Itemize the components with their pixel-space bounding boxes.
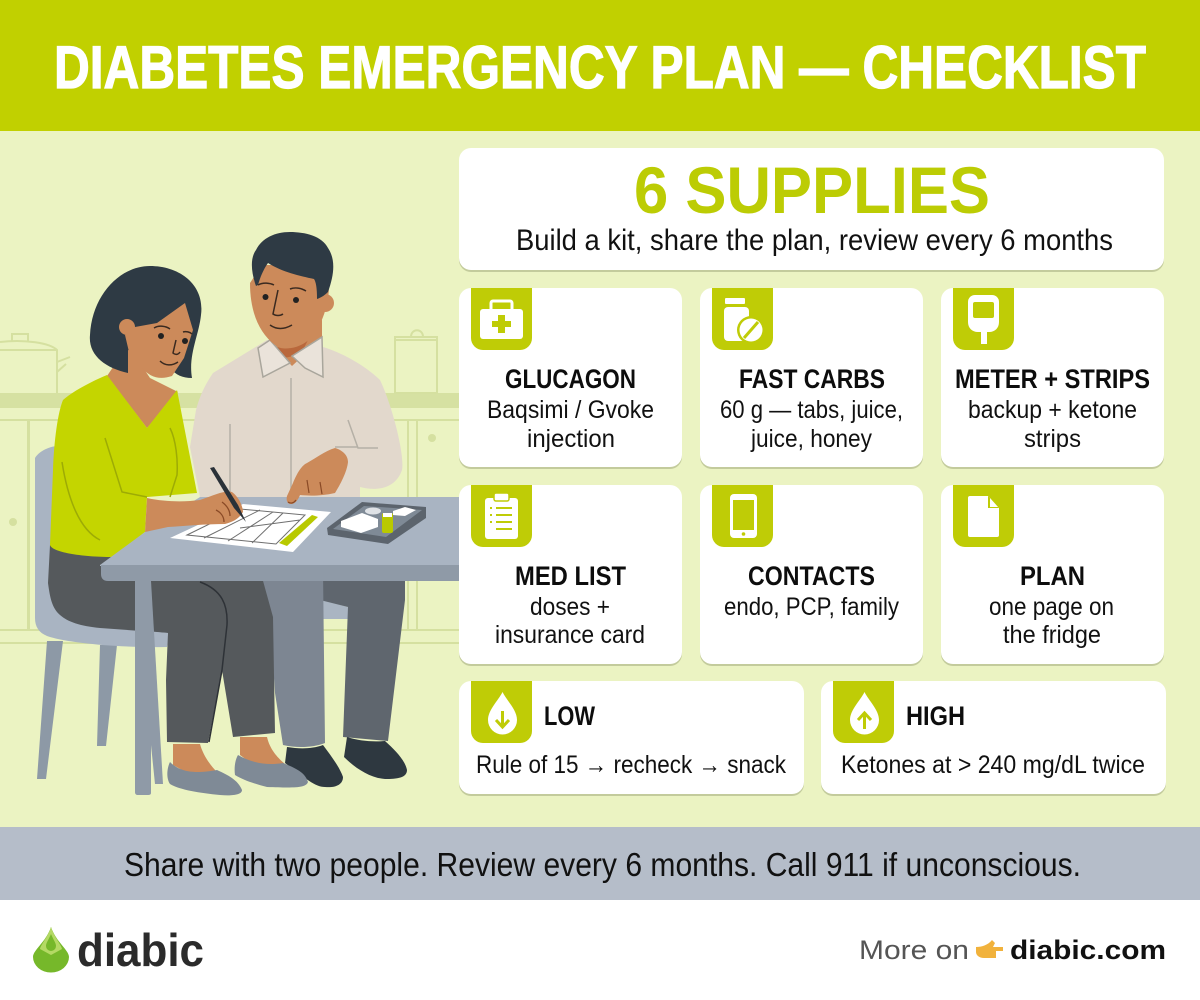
logo: diabic: diabic (77, 924, 204, 976)
supplies tray (327, 502, 426, 544)
chair seat front (135, 630, 168, 647)
checklist paper (170, 504, 331, 552)
icon: drop with up arrow (833, 681, 894, 743)
card: contacts: endo, PCP, family (724, 593, 899, 621)
card: plan: PLAN (1020, 561, 1085, 591)
website link (859, 935, 1166, 965)
title banner (0, 0, 1200, 131)
card: contacts (700, 485, 923, 666)
card: plan: one page on (989, 593, 1114, 621)
icon: pill bottle (712, 288, 773, 350)
woman's legs and shoes (48, 545, 308, 795)
card: low: LOW (544, 701, 595, 731)
table (100, 497, 459, 795)
card: low (459, 681, 804, 796)
card: meter + strips: backup + ketone (968, 396, 1137, 424)
woman's head (90, 266, 201, 378)
reminder band (0, 827, 1200, 900)
card: high: Ketones at > 240 mg/dL twice (841, 751, 1145, 779)
card: fast carbs: 60 g — tabs, juice, (720, 396, 903, 424)
headline card: Build a kit, share the plan, review every 6 months (516, 224, 1113, 257)
icon: clipboard (471, 485, 532, 547)
icon: logo drop (33, 927, 69, 972)
card: high (821, 681, 1166, 796)
card: fast carbs: juice, honey (750, 425, 872, 453)
card: fast carbs: FAST CARBS (739, 364, 885, 394)
man's legs and shoes (260, 570, 407, 787)
headline card (459, 148, 1164, 272)
icon: first aid kit (471, 288, 532, 350)
man's torso (190, 320, 402, 497)
reminder band: Share with two people. Review every 6 months. Call 911 if unconscious. (124, 846, 1081, 883)
card: plan (941, 485, 1164, 666)
woman's arm and hand with pen (145, 467, 246, 532)
card: med list: insurance card (495, 621, 645, 649)
icon: document (953, 485, 1014, 547)
kitchen backdrop (0, 330, 460, 643)
card: low: Rule of 15 → recheck → snack (476, 751, 786, 779)
card: med list: doses + (530, 593, 610, 621)
website link: diabic.com (1010, 935, 1166, 965)
card: glucagon: Baqsimi / Gvoke (487, 396, 654, 424)
card: glucagon: injection (527, 425, 615, 453)
card: contacts: CONTACTS (748, 561, 875, 591)
woman's neck and sweater (50, 345, 197, 557)
chair (35, 446, 348, 779)
card: glucagon (459, 288, 682, 469)
icon: phone (712, 485, 773, 547)
icon: drop with down arrow (471, 681, 532, 743)
card: plan: the fridge (1003, 621, 1101, 649)
card: med list: MED LIST (515, 561, 626, 591)
illustration: two people at a table (35, 232, 459, 795)
headline card: 6 SUPPLIES (634, 153, 990, 227)
card: meter + strips (941, 288, 1164, 469)
card: meter + strips: METER + STRIPS (955, 364, 1150, 394)
background panel (0, 131, 1200, 827)
card: high: HIGH (906, 701, 965, 731)
card: glucagon: GLUCAGON (505, 364, 636, 394)
icon: pointing hand (976, 940, 1003, 958)
card: meter + strips: strips (1024, 425, 1081, 453)
man's head (250, 232, 334, 348)
man's pointing hand (287, 448, 348, 504)
card: fast carbs (700, 288, 923, 469)
website link: More on (859, 935, 969, 965)
card: med list (459, 485, 682, 666)
icon: glucose meter (953, 288, 1014, 350)
